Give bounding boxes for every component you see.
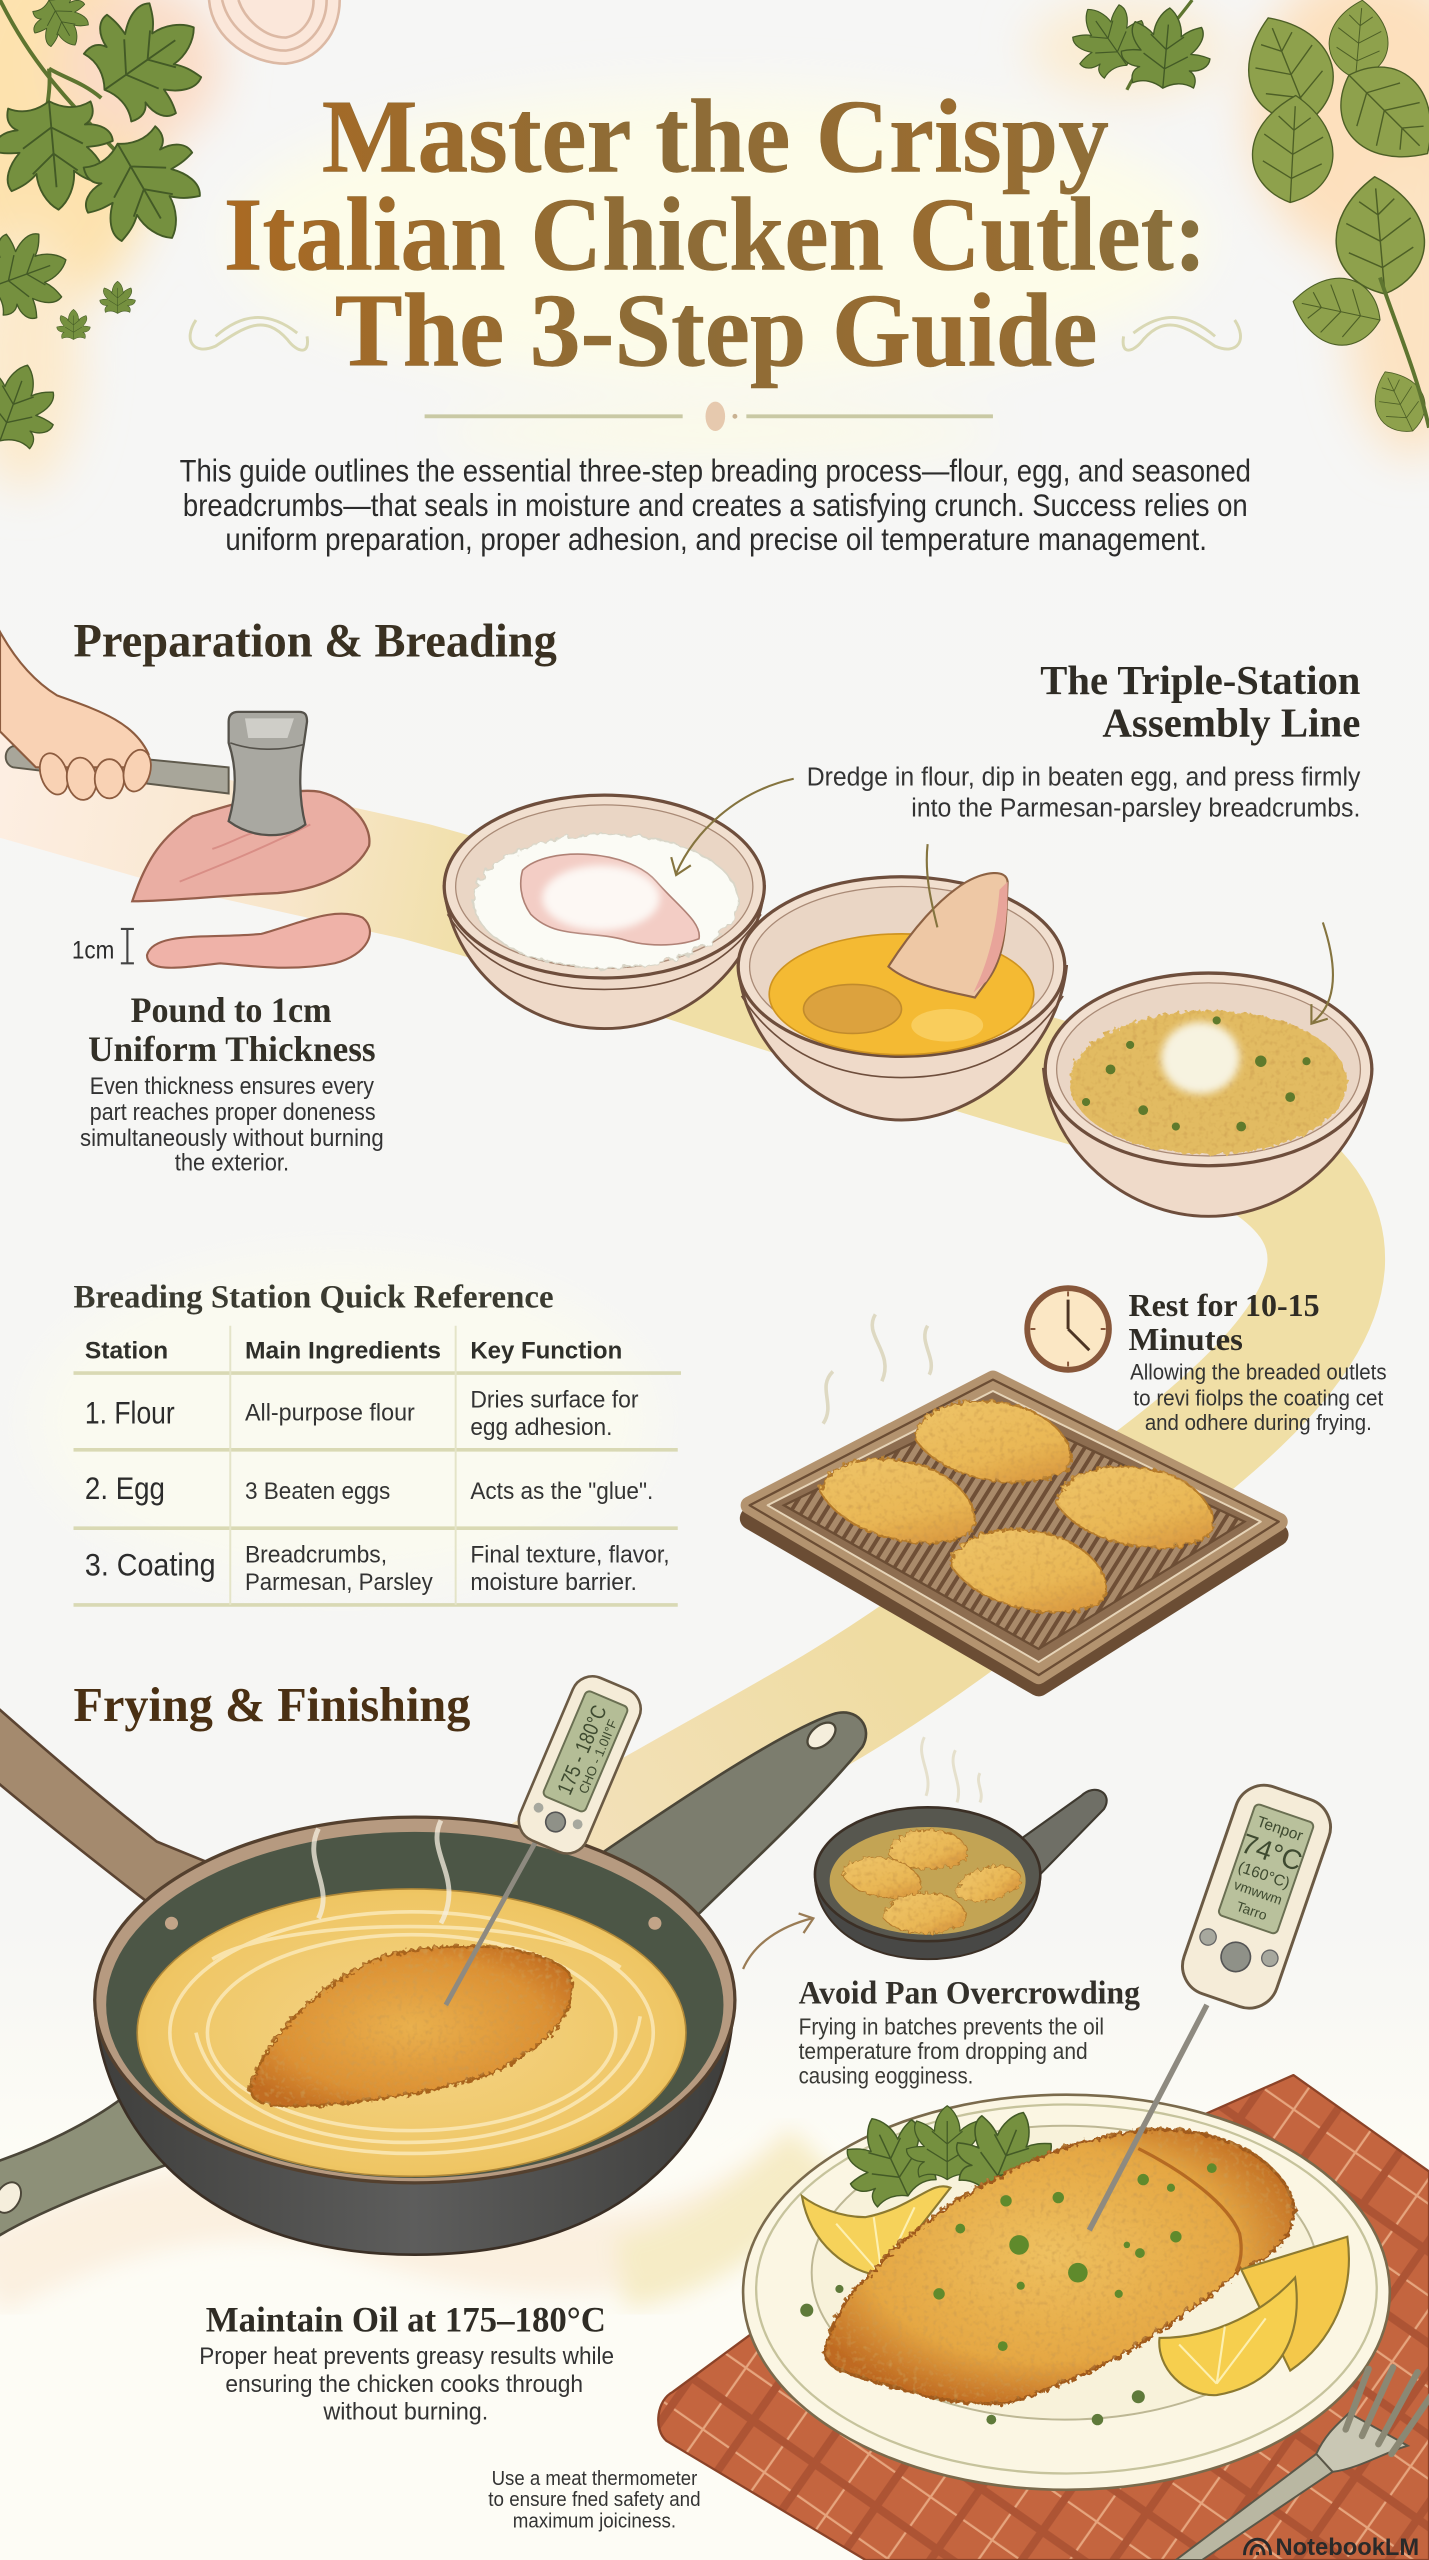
thermometer in cutlet: 74C xyxy=(1089,1777,1338,2230)
table cells: Dries surface for xyxy=(470,1386,639,1413)
herb flecks xyxy=(933,2163,1217,2351)
herbs: left side parsley sprigs xyxy=(0,218,135,456)
plaid napkin xyxy=(658,2075,1429,2560)
text: rest for 10-15 minutes: to revi fiolps the coating cet xyxy=(1133,1386,1384,1411)
handle hole xyxy=(803,1718,840,1754)
table header row: Key Function xyxy=(470,1337,622,1364)
table cells: 3 Beaten eggs xyxy=(245,1478,390,1505)
heading: preparation and breading: Preparation & Breading xyxy=(73,615,557,667)
steam above the tray xyxy=(823,1314,931,1424)
table columns xyxy=(230,1326,456,1605)
text: thermometer tip xyxy=(488,2468,701,2532)
ornamental divider xyxy=(425,402,993,431)
table cells: All-purpose flour xyxy=(245,1399,415,1426)
table row labels: 1. Flour xyxy=(85,1396,175,1431)
text: maintain oil temperature: without burning. xyxy=(322,2399,488,2426)
table cells: egg adhesion. xyxy=(470,1414,612,1441)
thermometer in oil: 175-180C: CHO - 1.0II°F xyxy=(576,1717,620,1796)
title: The 3-Step Guide xyxy=(335,273,1097,389)
text: rest for 10-15 minutes: Minutes xyxy=(1129,1322,1243,1357)
text: rest for 10-15 minutes: Allowing the breaded outlets xyxy=(1130,1360,1387,1385)
text: avoid pan overcrowding xyxy=(799,1975,1140,2088)
text: pound to 1cm: Uniform Thickness xyxy=(88,1029,376,1069)
decoration: onion ring xyxy=(209,0,340,64)
pan body xyxy=(95,2000,733,2255)
pan steam xyxy=(314,1820,449,1923)
pan handle top-left xyxy=(0,1701,245,1927)
text: thermometer tip: maximum joiciness. xyxy=(513,2510,676,2532)
bowl 1: flour xyxy=(444,795,764,1029)
thermometer in cutlet: 74C: (160°C) xyxy=(1236,1859,1292,1892)
fork xyxy=(1176,2367,1429,2560)
oil swirls xyxy=(170,1912,653,2153)
text: pound to 1cm: the exterior. xyxy=(175,1150,289,1177)
thin cutlet with 1cm scale: 1cm xyxy=(72,936,114,964)
thermometer in cutlet: 74C: 74°C xyxy=(1237,1827,1306,1877)
lower handle hole xyxy=(0,2178,26,2217)
table cells: Final texture, flavor, xyxy=(470,1541,670,1568)
title swirl ornaments xyxy=(190,317,1241,350)
illustration: small pan with cutlets xyxy=(815,1790,1107,1959)
table row labels xyxy=(85,1396,216,1583)
text: maintain oil temperature: ensuring the chicken cooks through xyxy=(225,2371,583,2398)
thin cutlet with 1cm scale xyxy=(72,914,370,968)
text: triple-station assembly line: into the Parmesan-parsley breadcrumbs. xyxy=(911,794,1360,822)
thermometer in cutlet: 74C: Tarro xyxy=(1234,1898,1270,1923)
bowl 3: seasoned breadcrumbs xyxy=(1044,973,1372,1216)
intro paragraph xyxy=(180,454,1251,557)
table title: Breading Station Quick Reference xyxy=(73,1280,554,1316)
text: triple-station assembly line: The Triple-Station xyxy=(1040,658,1361,703)
illustration: resting tray with cutlets xyxy=(750,1380,1279,1685)
arrows to the bowls xyxy=(671,779,1333,1024)
text: maintain oil temperature xyxy=(199,2299,614,2426)
text: maintain oil temperature: Proper heat prevents greasy results while xyxy=(199,2343,614,2370)
heading: frying and finishing: Frying & Finishing xyxy=(73,1677,470,1732)
title: Italian Chicken Cutlet: xyxy=(224,176,1207,292)
title: Master the Crispy xyxy=(322,78,1109,194)
rivets xyxy=(165,1917,661,1930)
cutlets on rack xyxy=(813,1389,1220,1625)
illustration: pounding chicken with mallet xyxy=(0,632,369,901)
pan handle lower-left xyxy=(0,2098,204,2240)
table header row: Station xyxy=(85,1337,168,1364)
text: avoid pan overcrowding: temperature from dropping and xyxy=(799,2038,1088,2064)
text: thermometer tip: Use a meat thermometer xyxy=(492,2468,698,2490)
small pan steam xyxy=(922,1737,981,1802)
plate xyxy=(743,2095,1390,2490)
illustration: plated cutlet xyxy=(743,2094,1390,2490)
plate herb crumbs xyxy=(800,2285,1145,2425)
text: triple-station assembly line: Dredge in flour, dip in beaten egg, and press firmly xyxy=(807,763,1361,791)
parsley garnish xyxy=(829,2094,1069,2216)
text: rest for 10-15 minutes: Rest for 10-15 xyxy=(1129,1288,1320,1323)
illustration: large frying pan with oil xyxy=(0,1701,866,2255)
table cells: Acts as the "glue". xyxy=(470,1478,653,1505)
cutlet fold xyxy=(1138,2149,1241,2271)
intro paragraph: breadcrumbs—that seals in moisture and creates a satisfying crunch. Success relies on xyxy=(183,488,1248,523)
text: avoid pan overcrowding: Frying in batches prevents the oil xyxy=(799,2013,1104,2039)
text: pound to 1cm: Even thickness ensures every xyxy=(90,1073,374,1100)
frying cutlet xyxy=(250,1946,572,2106)
text: triple-station assembly line: Assembly Line xyxy=(1102,700,1360,745)
table cells: moisture barrier. xyxy=(470,1569,637,1596)
bowl 2: beaten egg xyxy=(738,873,1066,1120)
thermometer in oil: 175-180C xyxy=(446,1670,647,2005)
text: maintain oil temperature: Maintain Oil at 175–180°C xyxy=(206,2299,606,2339)
oil xyxy=(137,1889,686,2176)
table grid xyxy=(73,1373,681,1605)
text: pound to 1cm: Pound to 1cm xyxy=(131,990,332,1030)
text: pound to 1cm xyxy=(80,990,384,1177)
text: rest for 10-15 minutes: and odhere during frying. xyxy=(1145,1410,1372,1435)
winding recipe path band xyxy=(0,767,1326,2278)
table row labels: 2. Egg xyxy=(85,1471,165,1506)
table cells: Parmesan, Parsley xyxy=(245,1569,433,1596)
pan handle top-right xyxy=(604,1712,866,1927)
text: thermometer tip: to ensure fned safety and xyxy=(488,2489,701,2511)
breaded cutlet xyxy=(824,2129,1294,2404)
pan rim xyxy=(95,1817,735,2183)
herbs: top-left parsley xyxy=(0,0,228,268)
title xyxy=(224,78,1207,389)
table header row xyxy=(85,1337,622,1364)
intro paragraph: This guide outlines the essential three-step breading process—flour, egg, and seasoned xyxy=(180,454,1251,489)
thermometer in oil: 175-180C: 175 - 180°C xyxy=(553,1702,612,1798)
text: pound to 1cm: simultaneously without burning xyxy=(80,1125,384,1152)
table row labels: 3. Coating xyxy=(85,1548,216,1583)
text: avoid pan overcrowding: Avoid Pan Overcrowding xyxy=(799,1975,1140,2011)
text: rest for 10-15 minutes xyxy=(1129,1288,1387,1435)
table cells: Breadcrumbs, xyxy=(245,1541,387,1568)
thermometer in cutlet: 74C: Tenpor xyxy=(1255,1813,1305,1845)
text: pound to 1cm: part reaches proper doneness xyxy=(90,1099,376,1126)
text: triple-station assembly line xyxy=(807,658,1361,822)
intro paragraph: uniform preparation, proper adhesion, and precise oil temperature management. xyxy=(225,522,1207,557)
arrow to the small pan xyxy=(743,1913,813,1969)
breading station table xyxy=(73,1280,681,1605)
herbs: top-right parsley and basil xyxy=(1057,0,1429,441)
icon: clock xyxy=(1027,1288,1109,1370)
table cells xyxy=(245,1386,670,1596)
thermometer in cutlet: 74C: vmwwm xyxy=(1232,1876,1284,1908)
table header row: Main Ingredients xyxy=(245,1337,441,1364)
left lemon wedge xyxy=(802,2186,950,2276)
text: avoid pan overcrowding: causing eogginess. xyxy=(799,2062,973,2088)
right lemon wedges xyxy=(1159,2237,1349,2395)
pan interior xyxy=(106,1832,723,2178)
